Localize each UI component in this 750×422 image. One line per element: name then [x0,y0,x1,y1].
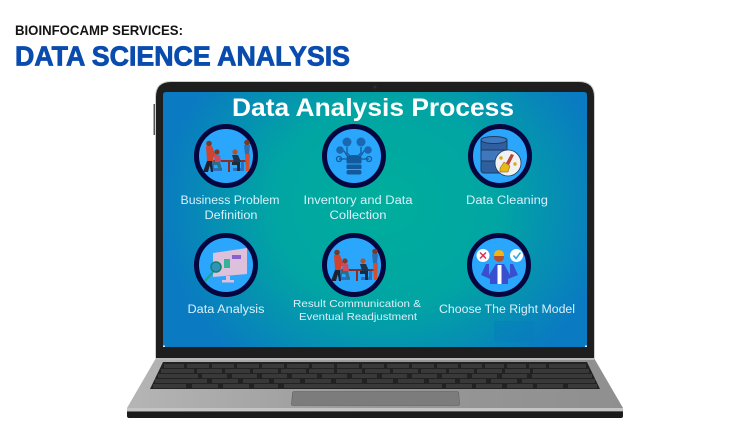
item: data analysis [188,236,265,316]
label [293,298,421,323]
item: business problem definition [180,126,280,222]
label: Inventory and Data [304,195,413,207]
screen title: Data Analysis Process [232,94,514,122]
label: Result Communication & [293,298,421,310]
label: Definition [204,210,258,222]
icon: team meeting [196,126,256,186]
item: data cleaning [466,126,548,207]
heading: services label: BIOINFOCAMP SERVICES: [15,22,183,38]
label: Data Analysis [188,304,265,316]
label: Collection [330,210,386,222]
heading: main title: DATA SCIENCE ANALYSIS [15,40,350,72]
laptop base [127,358,623,418]
label: Data Cleaning [466,195,548,207]
label [180,195,280,222]
icon: database network [324,126,384,186]
label: Eventual Readjustment [299,311,417,323]
item: result communication and eventual readjustment [293,236,421,323]
label: Choose The Right Model [439,304,575,316]
laptop lid and bezel [154,81,595,358]
item: choose the right model [439,236,575,316]
icon: team meeting [324,236,384,294]
keyboard [150,362,600,389]
label [304,195,413,222]
icon: monitor with magnifier [196,236,256,294]
icon: database with broom [470,126,530,186]
icon: person choosing [470,236,528,294]
laptop screen [163,92,587,347]
item: inventory and data collection [304,126,413,222]
laptop [127,81,623,418]
trackpad [292,392,460,406]
label: Business Problem [180,195,280,207]
